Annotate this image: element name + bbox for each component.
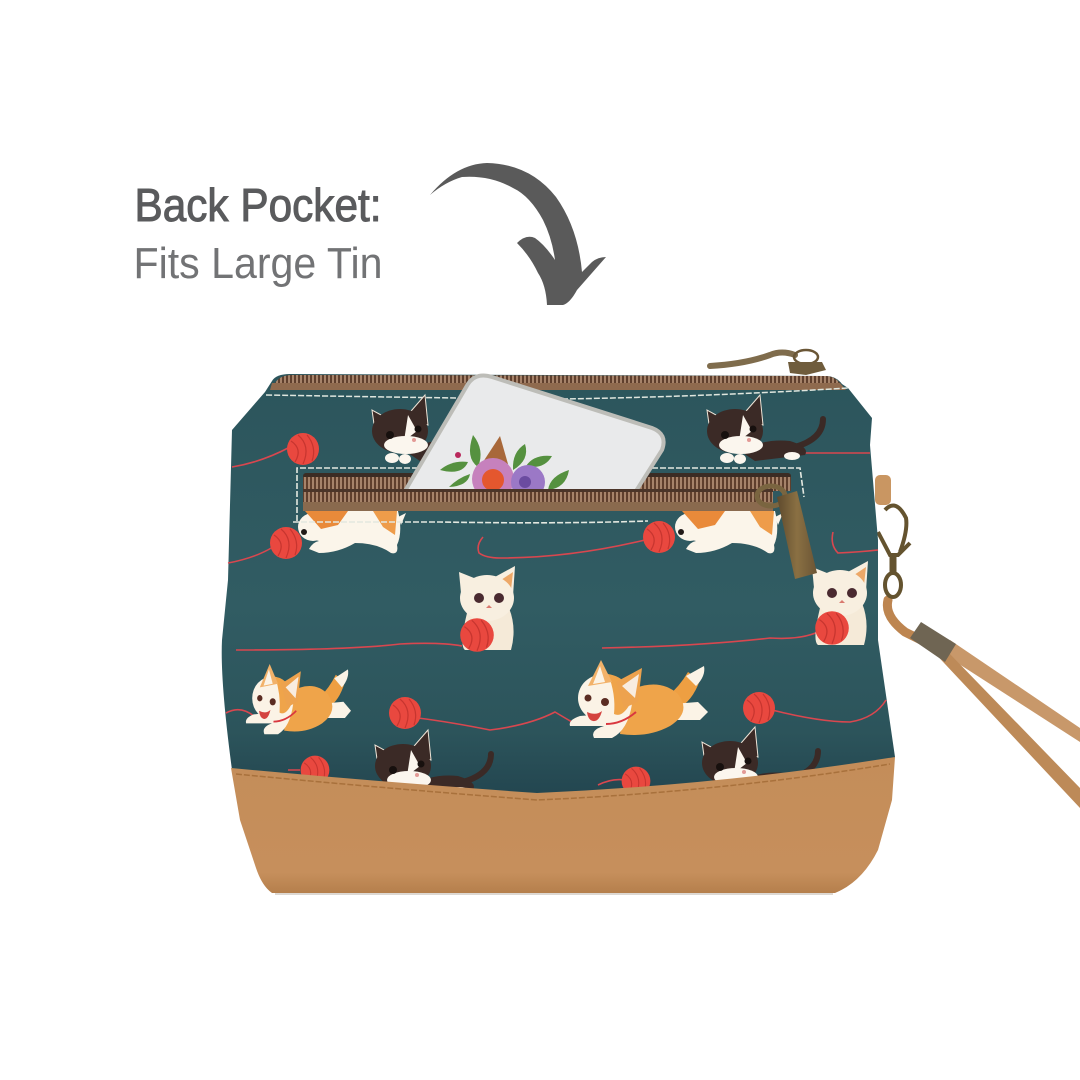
leather tab — [875, 475, 891, 505]
pocket lower stitching — [293, 521, 648, 523]
pull lever — [710, 352, 795, 366]
pocket lower zipper — [303, 489, 773, 511]
pocket top and side stitching — [297, 468, 804, 521]
leather base — [231, 757, 895, 893]
subheading line: Fits Large Tin: Fits Large Tin — [134, 239, 382, 288]
yarn balls behind tin — [270, 432, 775, 795]
pull ring — [757, 486, 785, 506]
zipper gap — [303, 489, 773, 492]
wrist strap — [875, 475, 1080, 808]
upper zipper teeth — [303, 477, 791, 491]
fabric print pattern — [226, 395, 886, 799]
arrow: curved pointing down to pocket — [430, 163, 606, 305]
heading line: Back Pocket: Back Pocket: — [134, 179, 382, 231]
flowers — [472, 458, 514, 489]
ground shadow — [275, 893, 833, 895]
leather stitching — [236, 764, 890, 800]
infographic canvas — [136, 163, 1080, 895]
lower zipper teeth — [303, 492, 773, 502]
strap lower band — [930, 648, 1080, 808]
pocket opening shadow — [303, 473, 791, 479]
tin in back pocket — [405, 376, 664, 500]
yarn threads — [226, 447, 886, 785]
zipper teeth — [275, 375, 840, 383]
lower zipper tape — [303, 502, 773, 511]
strap upper band — [945, 640, 1080, 742]
zipper tape — [270, 383, 846, 390]
tin lid — [405, 376, 664, 491]
brown ear — [483, 436, 508, 464]
pull tab — [777, 491, 817, 579]
lobster clasp — [878, 506, 910, 597]
strap loop — [887, 600, 925, 642]
bag: back view — [222, 350, 895, 895]
heading: back pocket label — [134, 179, 382, 288]
pull ring — [794, 350, 818, 364]
bag fabric body — [222, 374, 895, 795]
leather panel — [231, 757, 895, 893]
slider — [788, 362, 826, 375]
top stitching — [266, 388, 848, 399]
top zipper — [270, 375, 846, 390]
pocket upper zipper — [303, 473, 791, 491]
kittens, corgis and puppies — [246, 395, 868, 799]
top zip pull — [710, 350, 826, 375]
leaves — [440, 435, 569, 490]
pocket zip pull — [757, 486, 817, 579]
small buds — [455, 452, 461, 458]
strap metal wrap — [910, 622, 956, 662]
tin floral art — [440, 435, 569, 489]
